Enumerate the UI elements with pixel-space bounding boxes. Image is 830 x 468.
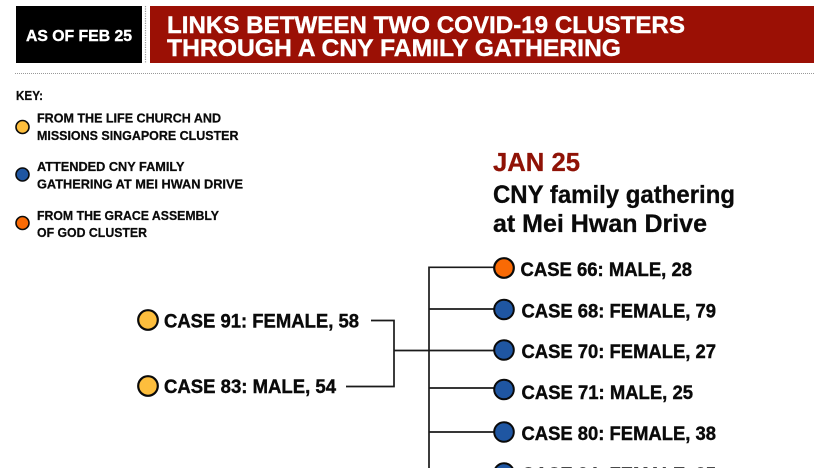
legend item: Grace Assembly cluster: FROM THE GRACE ASSEMBLY — [37, 208, 219, 223]
title banner — [150, 6, 814, 63]
case 91: CASE 91: FEMALE, 58 — [164, 310, 359, 332]
legend item: CNY family gathering: GATHERING AT MEI HWAN DRIVE — [37, 176, 243, 192]
event heading — [493, 147, 735, 238]
legend — [16, 88, 243, 240]
case 80: CASE 80: FEMALE, 38 — [522, 423, 716, 445]
event heading: CNY family gathering — [493, 181, 735, 209]
date badge: AS OF FEB 25 — [26, 28, 132, 45]
legend item: Grace Assembly cluster: OF GOD CLUSTER — [37, 225, 148, 240]
title banner: THROUGH A CNY FAMILY GATHERING — [167, 35, 621, 62]
legend item: Grace Assembly cluster — [16, 208, 219, 240]
date badge — [16, 6, 142, 63]
case 66: CASE 66: MALE, 28 — [520, 259, 692, 281]
legend item: Life Church cluster: MISSIONS SINGAPORE CLUSTER — [37, 128, 239, 143]
event heading: at Mei Hwan Drive — [493, 210, 707, 238]
case 71: CASE 71: MALE, 25 — [522, 382, 693, 404]
case 68: CASE 68: FEMALE, 79 — [522, 300, 716, 322]
legend item: Life Church cluster — [16, 110, 239, 143]
case 70: CASE 70: FEMALE, 27 — [522, 341, 716, 363]
legend heading: KEY: — [16, 88, 43, 103]
title banner: LINKS BETWEEN TWO COVID-19 CLUSTERS — [167, 12, 685, 39]
legend item: Life Church cluster: FROM THE LIFE CHURCH AND — [37, 110, 221, 126]
legend item: CNY family gathering: ATTENDED CNY FAMILY — [37, 159, 185, 174]
legend item: CNY family gathering — [16, 159, 243, 192]
connector lines — [346, 267, 494, 468]
event heading: JAN 25 — [493, 147, 580, 177]
case 83: CASE 83: MALE, 54 — [164, 376, 336, 398]
